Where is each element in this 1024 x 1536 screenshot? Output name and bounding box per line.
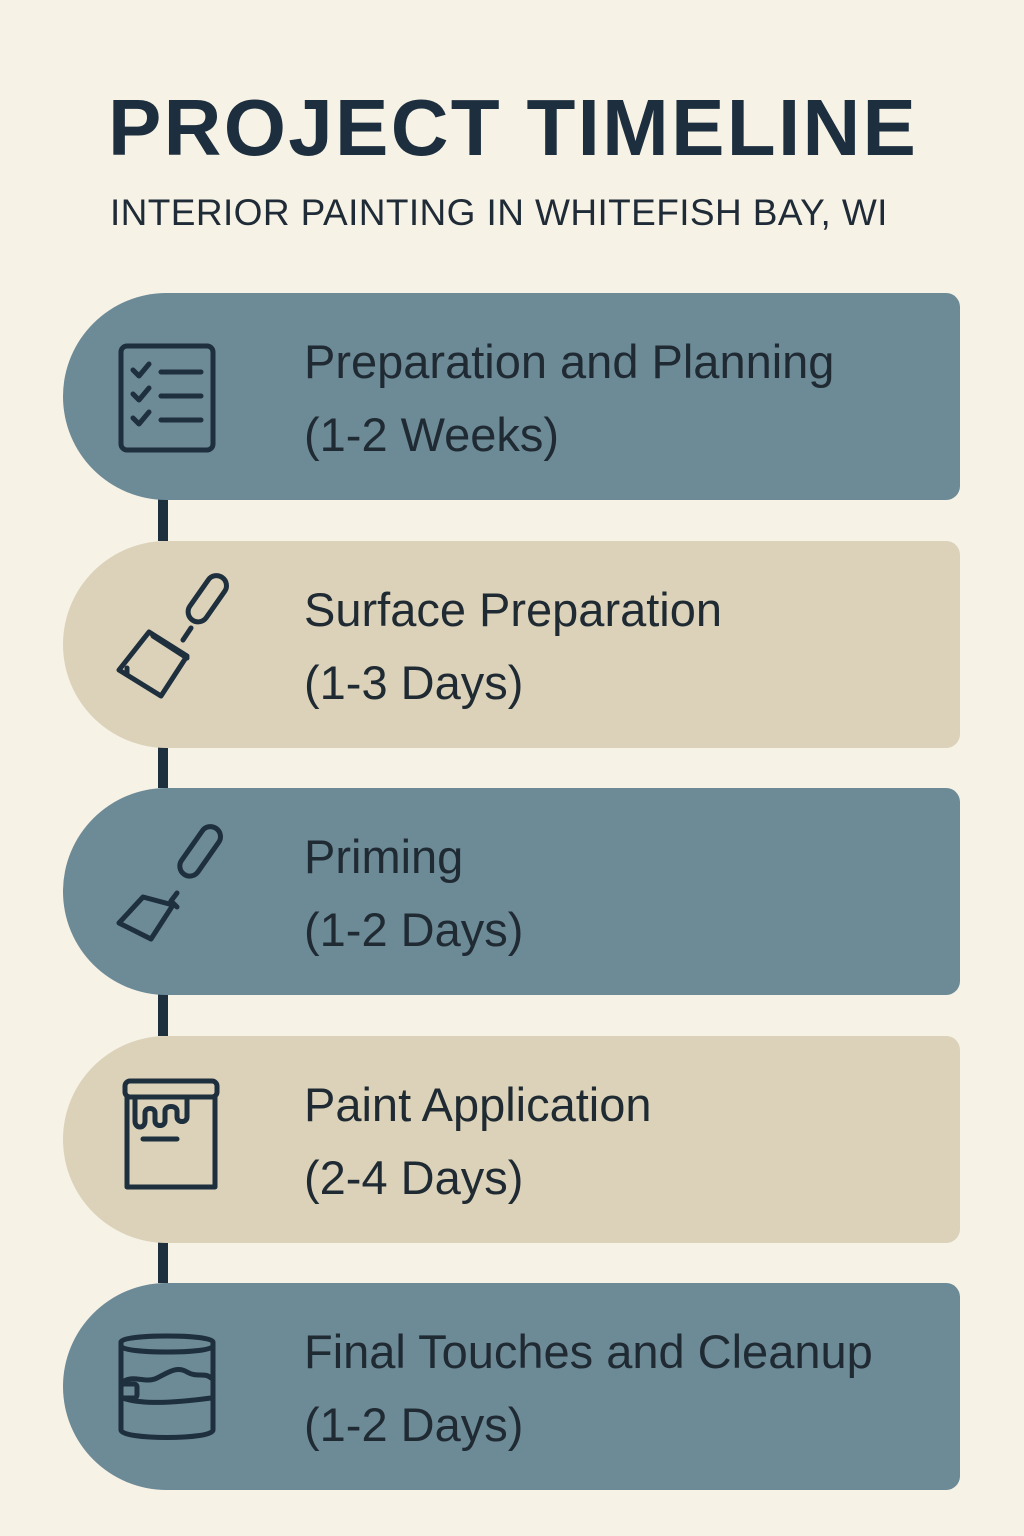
text: step 1 xyxy=(304,335,834,461)
text: step 5 xyxy=(304,1325,873,1451)
panel: step 3 xyxy=(63,788,960,995)
connector line 3 xyxy=(158,994,168,1036)
text: step 4 xyxy=(304,1078,652,1204)
connector line 2 xyxy=(158,747,168,788)
icon: open paint can xyxy=(118,1334,216,1440)
text: step 3: (1-2 Days) xyxy=(304,903,523,956)
panel: step 5 xyxy=(63,1283,960,1490)
text: step 3: Priming xyxy=(304,830,463,883)
panel: step 2 xyxy=(63,541,960,748)
text: step 4: (2-4 Days) xyxy=(304,1151,523,1204)
text: step 2: Surface Preparation xyxy=(304,583,722,636)
text: step 2 xyxy=(304,583,722,709)
text: step 2: (1-3 Days) xyxy=(304,656,523,709)
text: step 1: (1-2 Weeks) xyxy=(304,408,559,461)
connector line 1 xyxy=(158,499,168,541)
subtitle: INTERIOR PAINTING IN WHITEFISH BAY, WI xyxy=(110,192,888,233)
text: step 4: Paint Application xyxy=(304,1078,652,1131)
connector line 4 xyxy=(158,1242,168,1283)
icon: checklist xyxy=(118,344,216,452)
text: step 1: Preparation and Planning xyxy=(304,335,834,388)
icon: putty knife xyxy=(116,824,223,942)
panel: step 4 xyxy=(63,1036,960,1243)
title: PROJECT TIMELINE xyxy=(108,83,918,172)
icon: paint can xyxy=(122,1078,220,1190)
text: step 3 xyxy=(304,830,523,956)
icon: scraper xyxy=(116,573,229,698)
panel: step 1 xyxy=(63,293,960,500)
text: step 5: Final Touches and Cleanup xyxy=(304,1325,873,1378)
text: step 5: (1-2 Days) xyxy=(304,1398,523,1451)
